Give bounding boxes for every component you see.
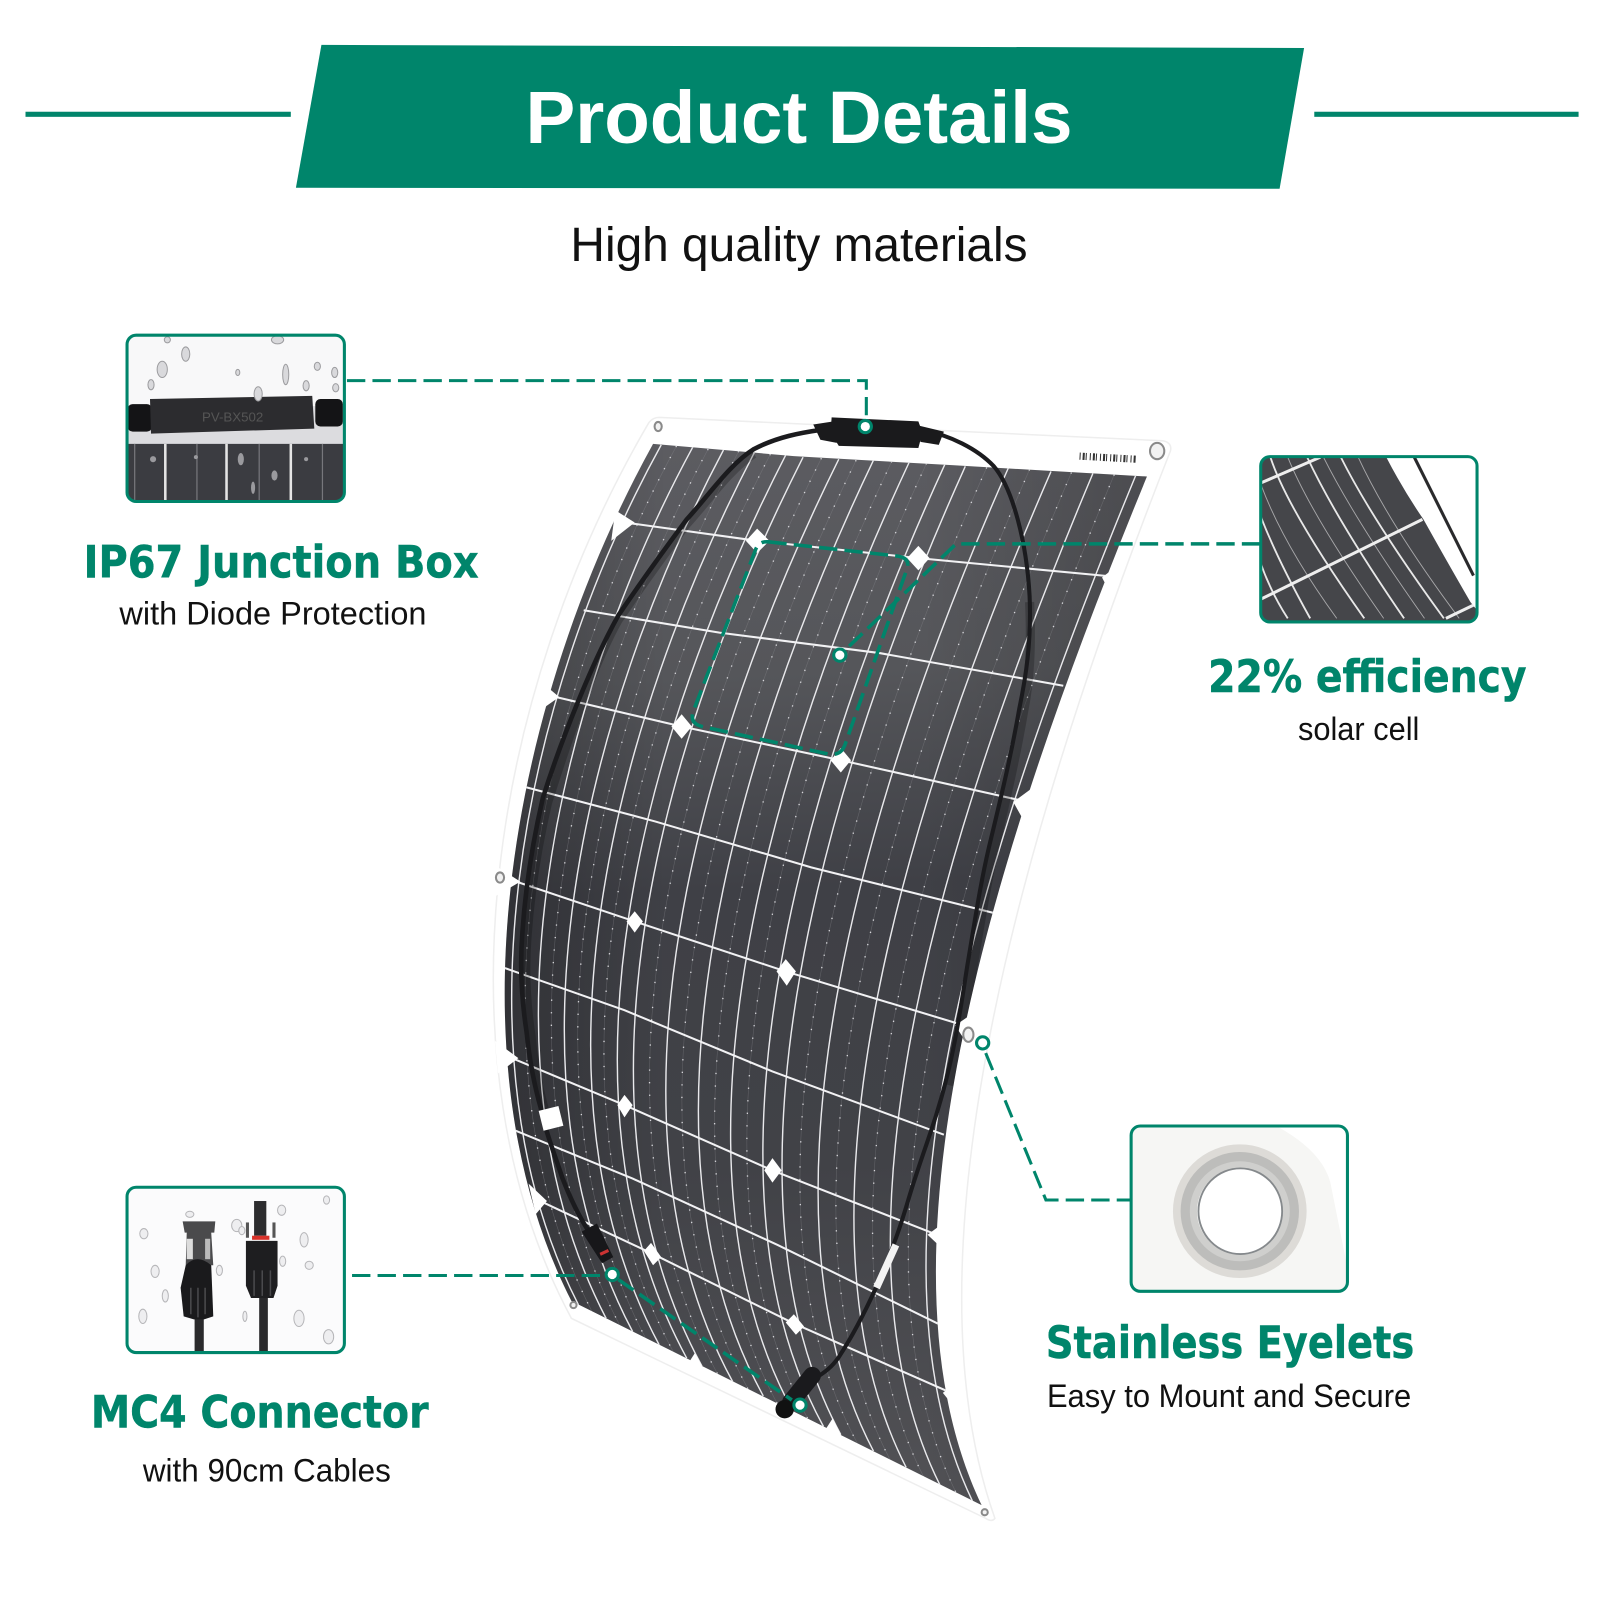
subtext: with Diode Protection: [118, 594, 427, 631]
thumbnail: junction box: [127, 335, 345, 502]
dashed leader: connector to lower plug: [618, 1280, 792, 1400]
cell corner diamonds and edge notches: [495, 510, 1120, 1439]
callout: MC4 connector: [91, 1187, 806, 1489]
cable tags: [539, 1106, 896, 1288]
thumbnail: eyelet: [1131, 1126, 1349, 1292]
thumbnail: solar cell: [1259, 456, 1479, 623]
dashed leader: eyelet: [986, 1053, 1131, 1200]
heading: Stainless Eyelets: [1046, 1316, 1414, 1369]
cable shadows on panel: [526, 454, 754, 1113]
callout: 22% efficiency: [692, 456, 1527, 754]
connector on panel upper: [582, 1223, 613, 1263]
dashed leader: junction box: [347, 381, 866, 416]
leader dot: upper plug: [606, 1268, 618, 1281]
subtitle: High quality materials: [570, 219, 1028, 272]
eyelets: [496, 422, 1164, 1515]
heading: 22% efficiency: [1208, 650, 1527, 703]
panel side shading: [505, 444, 1147, 1505]
leader dot: eyelet: [977, 1037, 989, 1049]
panel backing sheet: [493, 417, 1171, 1520]
subtext: with 90cm Cables: [142, 1452, 391, 1489]
solar panel: [493, 417, 1171, 1520]
thumbnail: junction box: PV-BX502: [202, 409, 263, 424]
callout: stainless eyelets: [977, 1037, 1414, 1414]
thumbnail: MC4 connectors: [127, 1187, 345, 1354]
dashed leader: efficiency: [840, 544, 1260, 655]
leader dot: efficiency: [834, 649, 846, 661]
cable right: [816, 431, 1030, 1378]
panel cells: [505, 444, 1147, 1505]
right header rule: [1314, 112, 1579, 117]
heading: IP67 Junction Box: [84, 536, 479, 589]
cell grid lines: [500, 445, 1136, 1501]
connector on panel lower: [776, 1376, 812, 1418]
cable left: [521, 430, 822, 1230]
callout: IP67 junction box: [84, 335, 871, 631]
heading: MC4 Connector: [91, 1386, 429, 1439]
leader dot: lower plug: [794, 1399, 806, 1411]
dashed leader: connector: [352, 1274, 602, 1277]
highlighted cell area: [692, 542, 908, 754]
title banner: [296, 45, 1304, 189]
junction box: [813, 417, 944, 448]
left header rule: [26, 112, 291, 117]
panel barcode label: [1080, 456, 1136, 459]
subtext: Easy to Mount and Secure: [1047, 1377, 1411, 1414]
title: Product Details: [526, 76, 1072, 159]
subtext: solar cell: [1298, 710, 1419, 747]
leader dot: junction box: [859, 420, 871, 433]
